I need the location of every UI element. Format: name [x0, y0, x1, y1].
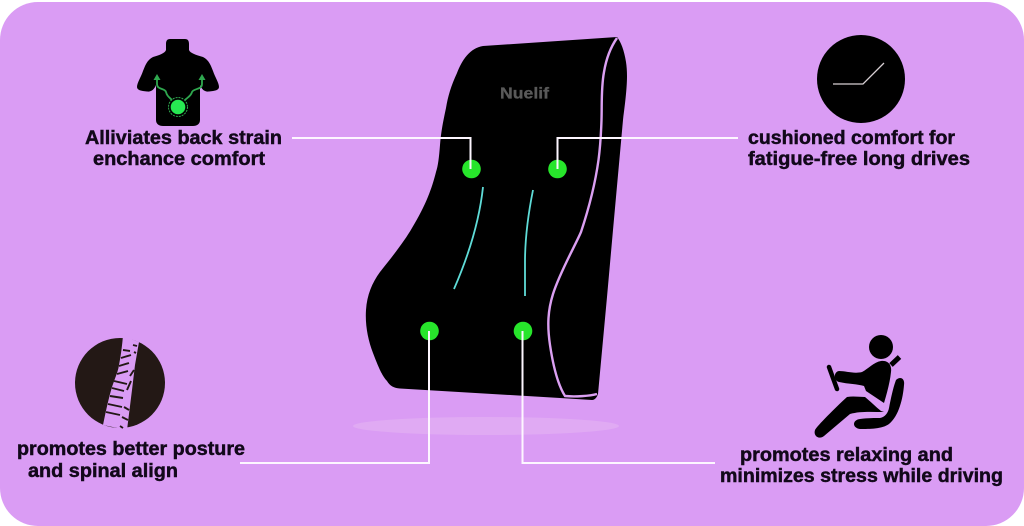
- connector upper right: [558, 138, 738, 169]
- label: back strain: [85, 128, 282, 170]
- label: cushioned comfort: fatigue-free long drives: [748, 149, 970, 170]
- vertebrae: [106, 345, 137, 428]
- steering wheel: [829, 367, 837, 389]
- cushion side seam: [548, 38, 617, 396]
- shoulder strap: [891, 357, 900, 365]
- leg: [815, 397, 884, 438]
- icon: seated driver: [815, 335, 904, 438]
- label: posture: promotes better posture: [17, 439, 245, 460]
- dark circle: [75, 338, 165, 428]
- label: relaxing: [720, 445, 1003, 487]
- green nerve lines: [157, 77, 202, 100]
- label: relaxing: promotes relaxing and: [740, 445, 953, 466]
- glowing centre: [168, 98, 188, 116]
- green point lower right: [514, 322, 532, 340]
- label: relaxing: minimizes stress while driving: [720, 466, 1003, 487]
- seat: [854, 378, 904, 429]
- icon: torso: [137, 39, 219, 126]
- cushion body: [366, 37, 627, 400]
- clock hands: [833, 63, 884, 84]
- clock face: [817, 35, 905, 123]
- teal stitch right: [525, 190, 533, 296]
- label: back strain: enchance comfort: [93, 149, 266, 170]
- icon: spine: [75, 336, 165, 430]
- floor shadow: [353, 417, 619, 435]
- connector lower right: [522, 331, 715, 463]
- connector lower left: [240, 331, 429, 463]
- torso and arm: [835, 361, 891, 403]
- label: cushioned comfort: cushioned comfort for: [748, 128, 956, 149]
- arrowheads: [154, 74, 206, 80]
- label: posture: [17, 439, 245, 482]
- green point lower left: [420, 322, 439, 340]
- cushion: [366, 37, 627, 400]
- connector upper left: [292, 138, 470, 169]
- label: cushioned comfort: [748, 128, 970, 170]
- head: [869, 335, 893, 359]
- torso silhouette: [137, 39, 219, 126]
- icon: clock: [817, 35, 905, 123]
- spine column: [103, 336, 139, 430]
- green point upper left: [462, 160, 481, 178]
- label: posture: and spinal align: [28, 461, 178, 482]
- brand name: Nuelif: [500, 86, 550, 102]
- teal stitch left: [454, 187, 483, 289]
- label: back strain: Alliviates back strain: [85, 128, 282, 149]
- green point upper right: [548, 160, 567, 178]
